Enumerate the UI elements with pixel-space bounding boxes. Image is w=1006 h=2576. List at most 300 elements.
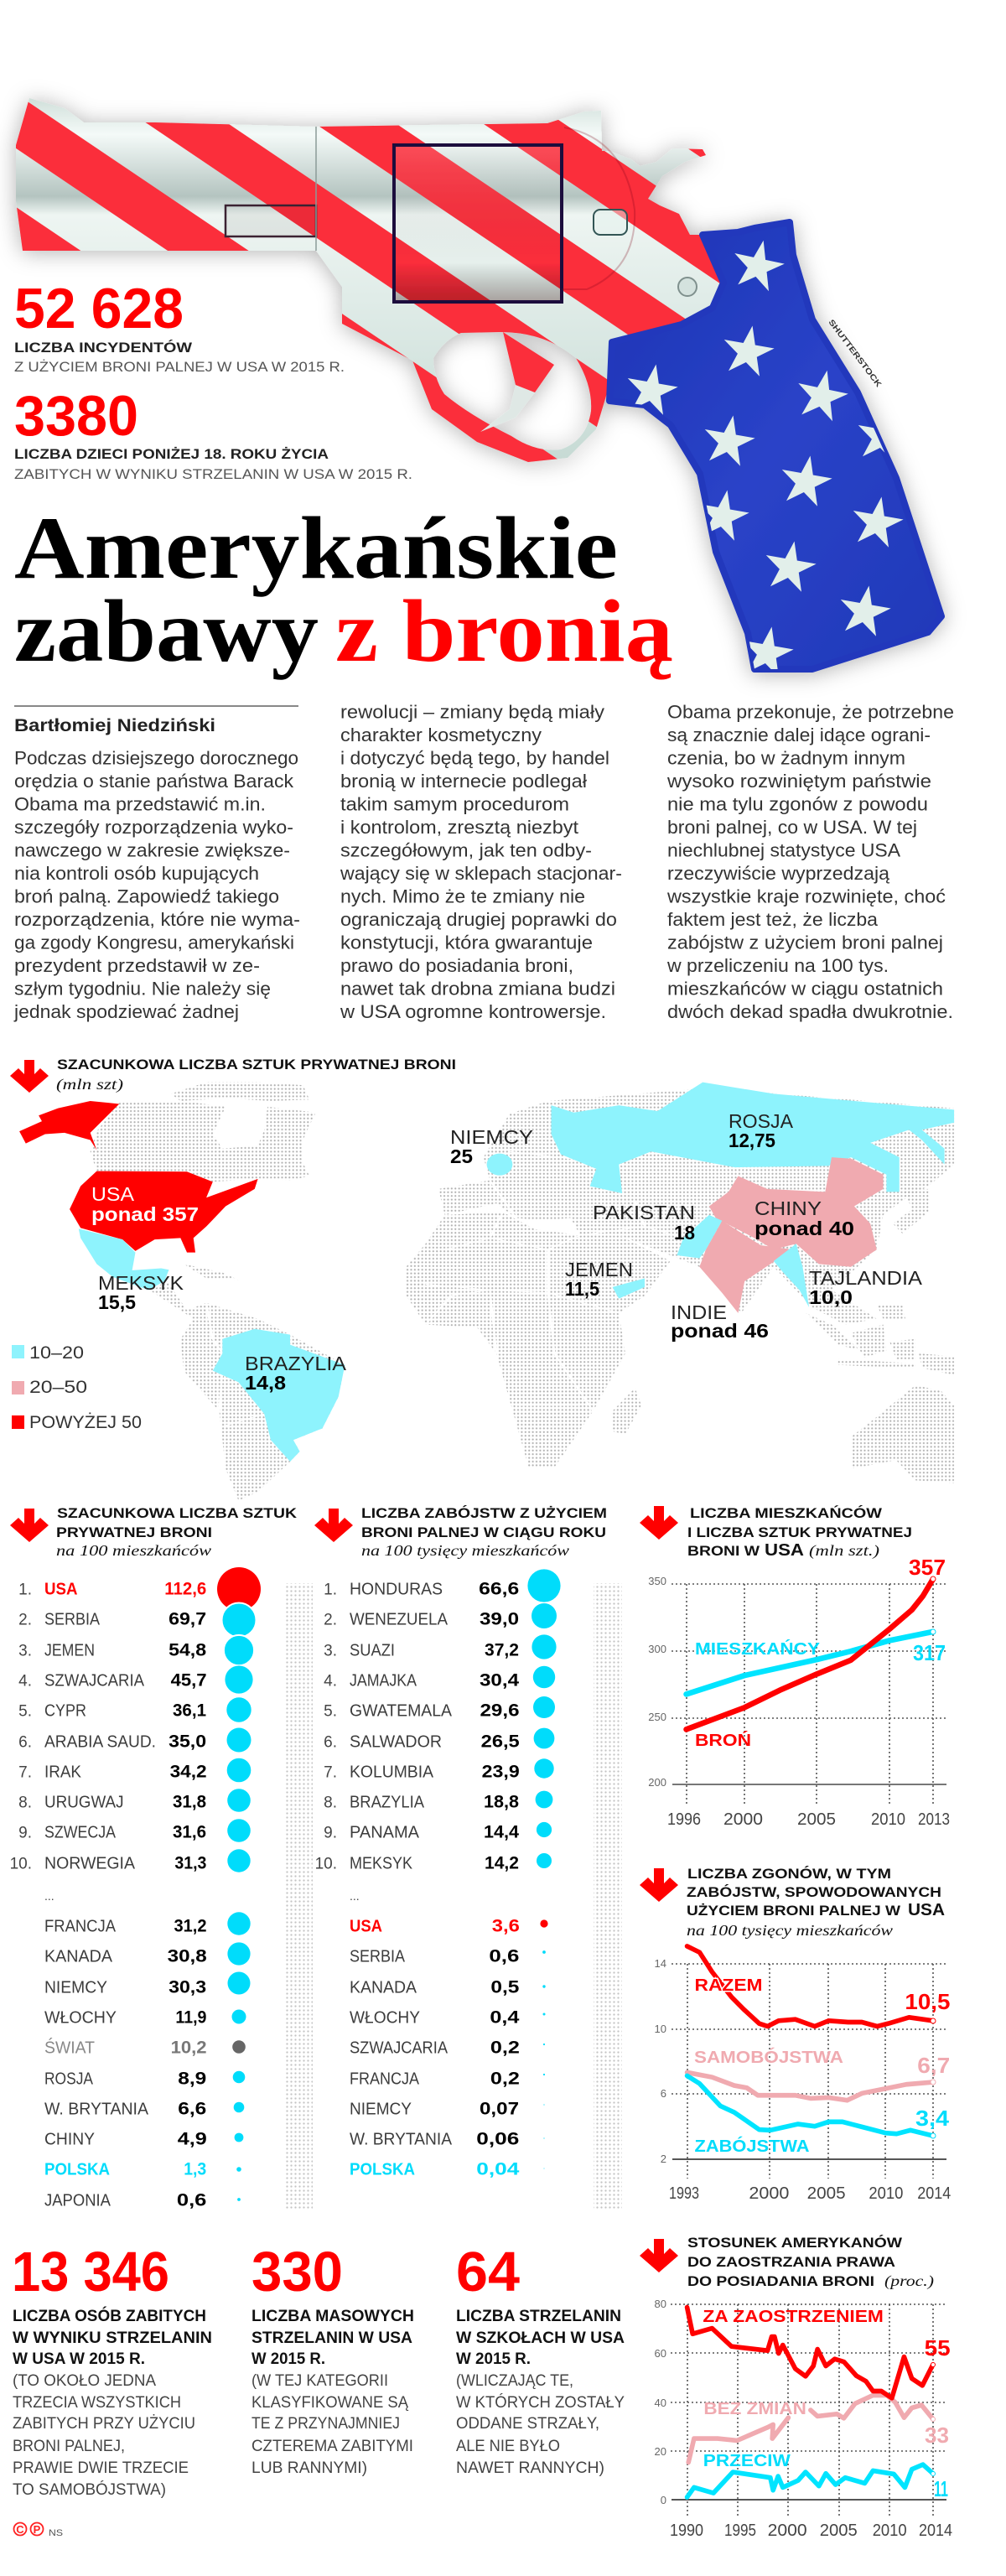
row 4 Jamajka: 4. xyxy=(324,1672,337,1690)
value: 10,5: 10,5 xyxy=(905,1989,950,2014)
frame seam xyxy=(315,127,317,251)
row 8 Urugwaj: 31,8 xyxy=(173,1793,206,1811)
map label: Chiny: CHINY xyxy=(754,1197,822,1219)
row 3 Jemen: 3. xyxy=(18,1642,32,1660)
article column 3: niechlubnej statystyce USA xyxy=(667,840,900,860)
row W. Brytania: W. BRYTANIA xyxy=(350,2130,453,2148)
illustration: revolver in American flag colours xyxy=(16,98,941,679)
row Świat: ŚWIAT xyxy=(44,2038,95,2058)
stat: 52 628 incidents: 52 628 xyxy=(14,277,184,340)
row 6 Salwador xyxy=(324,1728,554,1751)
end markers xyxy=(931,1576,936,1634)
stat: 64 school shootings xyxy=(456,2241,625,2477)
grip: blue with white stars xyxy=(609,222,941,679)
map label: Meksyk: MEKSYK xyxy=(98,1272,184,1294)
article column 1: ga zgody Kongresu, amerykański xyxy=(14,932,294,953)
article column 2: szczegółowym, jak ten odby- xyxy=(340,840,592,860)
row Polska: 0,04 xyxy=(476,2160,520,2179)
row 4 Szwajcaria: 45,7 xyxy=(171,1670,207,1690)
map label: Niemcy: NIEMCY xyxy=(450,1126,533,1148)
stat note: (TO OKOŁO JEDNA xyxy=(13,2372,156,2390)
row 2 Wenezuela: 39,0 xyxy=(480,1610,519,1628)
article column 2: konstytucji, która gwarantuje xyxy=(340,932,593,953)
row Włochy: 0,4 xyxy=(490,2007,520,2028)
stat note xyxy=(252,2372,413,2477)
article column 1: Obama ma przedstawić m.in. xyxy=(14,793,266,815)
heading: population and guns in USA: BRONI W xyxy=(687,1543,760,1559)
row 2 Wenezuela: 2. xyxy=(324,1612,337,1628)
stat note xyxy=(13,2372,195,2499)
row Francja xyxy=(350,2070,545,2088)
article column 1: nawczego w zakresie zwiększe- xyxy=(14,840,290,860)
map label: Rosja: ROSJA xyxy=(729,1110,794,1132)
row 7 Kolumbia xyxy=(324,1758,554,1781)
article column 3: w przeliczeniu na 100 tys. xyxy=(666,955,889,976)
row Włochy: WŁOCHY xyxy=(350,2009,420,2028)
map label: Brazylia: BRAZYLIA xyxy=(245,1353,347,1374)
stat description: W USA W 2015 R. xyxy=(13,2350,145,2368)
line: for tightening xyxy=(687,2308,933,2398)
stat note: KLASYFIKOWANE SĄ xyxy=(252,2394,408,2412)
map label: Indie xyxy=(671,1301,769,1342)
article column 3: zabójstw z użyciem broni palnej xyxy=(667,932,943,953)
article column 3: czenia, bo w żadnym innym xyxy=(667,748,905,768)
heading: guns per 100 residents: na 100 mieszkańców xyxy=(56,1542,211,1559)
stat note: TO SAMOBÓJSTWA) xyxy=(13,2480,166,2499)
chart 1 y axis: 300 xyxy=(648,1643,666,1655)
line: against xyxy=(687,2464,933,2497)
stat note: LUB RANNYMI) xyxy=(252,2459,367,2477)
row Francja: 0,2 xyxy=(490,2070,520,2088)
row 1 Honduras: 1. xyxy=(324,1581,337,1598)
map label: Tajlandia: 10,0 xyxy=(809,1286,853,1308)
stat note: NAWET RANNYCH) xyxy=(456,2459,604,2477)
map label: Jemen: 11,5 xyxy=(565,1278,599,1300)
stat description xyxy=(252,2308,414,2368)
row 1 USA xyxy=(18,1567,261,1611)
article column 2: i dotyczyć będą tego, by handel xyxy=(340,748,609,768)
row Kanada: 30,8 xyxy=(168,1947,207,1966)
row USA xyxy=(350,1917,548,1935)
legend: POWYŻEJ 50 xyxy=(29,1413,142,1432)
row W. Brytania xyxy=(350,2130,545,2148)
chart 2 x axis: 2014 xyxy=(917,2184,951,2203)
chart 1 x axis: 1996 xyxy=(667,1810,701,1829)
row 4 Szwajcaria: 4. xyxy=(18,1672,32,1690)
chart 2 x axis xyxy=(669,2184,951,2203)
row 4 Jamajka xyxy=(324,1666,555,1690)
row 5 Cypr: 36,1 xyxy=(173,1701,206,1721)
country: Russia xyxy=(551,1083,954,1193)
chart 2 grid xyxy=(672,1964,946,2179)
label: Broń: BROŃ xyxy=(695,1731,751,1750)
land: dotted continents xyxy=(91,1083,954,1500)
stat description: W 2015 R. xyxy=(456,2350,531,2368)
row 1 Honduras: HONDURAS xyxy=(350,1580,443,1598)
row 9 Szwecja: SZWECJA xyxy=(44,1823,117,1841)
map label: USA xyxy=(91,1183,199,1225)
heading: deaths from firearms in USA xyxy=(687,1866,945,1939)
row 3 Suazi: 3. xyxy=(324,1642,337,1660)
row 10 Meksyk: 14,2 xyxy=(485,1853,519,1873)
map label: Chiny xyxy=(754,1197,854,1239)
chart 2 x axis: 2010 xyxy=(869,2184,903,2203)
row 8 Urugwaj: 8. xyxy=(18,1794,32,1811)
row 10 Norwegia: 31,3 xyxy=(174,1853,206,1873)
chart 1 x axis: 2013 xyxy=(918,1810,950,1829)
row Włochy: 11,9 xyxy=(175,2007,206,2028)
row 1 USA: 1. xyxy=(18,1581,32,1598)
map label: Brazylia xyxy=(245,1353,347,1394)
row Serbia xyxy=(350,1947,546,1966)
row Kanada xyxy=(44,1942,251,1966)
title: Amerykańskie xyxy=(14,499,618,597)
line chart: population and guns in USA xyxy=(648,1555,950,1829)
chart 3 y axis xyxy=(655,2298,666,2506)
chart 1 x axis xyxy=(667,1810,950,1829)
stat: 52 628 incidents: LICZBA INCYDENTÓW xyxy=(14,340,193,356)
heading: gun homicides per 100k: BRONI PALNEJ W CIĄGU ROKU xyxy=(361,1524,606,1540)
chart 1 x axis: 2000 xyxy=(723,1810,763,1829)
barrel lower slot xyxy=(226,205,316,236)
title xyxy=(14,499,673,680)
row Polska: POLSKA xyxy=(350,2160,415,2179)
chart 3 x axis xyxy=(670,2521,952,2540)
row 3 Suazi xyxy=(324,1634,557,1660)
icon: table 2 arrow xyxy=(314,1509,353,1542)
stat note: W KTÓRYCH ZOSTAŁY xyxy=(456,2393,625,2412)
row Francja: 31,2 xyxy=(174,1917,206,1935)
article column 3: nie ma tylu zgonów z powodu xyxy=(667,793,928,815)
map label: Niemcy xyxy=(450,1126,533,1167)
map label: Jemen: JEMEN xyxy=(565,1259,633,1280)
article column 2: rewolucji – zmiany będą miały xyxy=(340,701,604,723)
trigger xyxy=(480,332,554,432)
row 6 Salwador: 26,5 xyxy=(481,1732,520,1751)
stat description: STRZELANIN W USA xyxy=(252,2329,412,2347)
row 7 Kolumbia: KOLUMBIA xyxy=(350,1763,434,1781)
article column 2: wający się w sklepach stacjonar- xyxy=(340,863,622,884)
chart 3 y axis: 80 xyxy=(655,2298,666,2310)
stat: 3380 children xyxy=(14,384,412,482)
value: 55: 55 xyxy=(925,2335,951,2360)
row 8 Brazylia xyxy=(324,1791,552,1811)
article column 2: nych. Mimo że te zmiany nie xyxy=(340,886,585,907)
heading: deaths from firearms in USA: LICZBA ZGONÓW, W TYM xyxy=(687,1866,891,1882)
chart 3 y axis: 0 xyxy=(661,2494,666,2506)
row Rosja: ROSJA xyxy=(44,2070,94,2088)
map label: Brazylia: 14,8 xyxy=(245,1372,286,1394)
chart 1 x axis: 2010 xyxy=(871,1810,905,1829)
legend: 10–20 xyxy=(29,1343,84,1363)
label: Zabójstwa: ZABÓJSTWA xyxy=(694,2136,810,2156)
row 2 Wenezuela: WENEZUELA xyxy=(350,1610,449,1628)
end markers xyxy=(931,2018,936,2138)
chart 3 x axis: 2000 xyxy=(768,2521,807,2540)
value: 3,4: 3,4 xyxy=(915,2106,950,2131)
copyright marks: NS xyxy=(49,2528,63,2538)
stat description: W SZKOŁACH W USA xyxy=(456,2329,625,2347)
row Serbia: SERBIA xyxy=(350,1947,406,1966)
row 1 Honduras xyxy=(324,1569,561,1602)
stat description: W 2015 R. xyxy=(252,2350,325,2368)
heading: private guns map: (mln szt) xyxy=(56,1076,123,1093)
row W. Brytania: W. BRYTANIA xyxy=(44,2100,149,2118)
stat: 330 mass shootings xyxy=(252,2241,414,2477)
title: z bronią xyxy=(335,582,673,680)
row Francja: FRANCJA xyxy=(350,2070,420,2088)
row 6 Arabia Saud.: ARABIA SAUD. xyxy=(44,1732,156,1751)
chart 1 grid xyxy=(672,1584,946,1804)
row Niemcy: 30,3 xyxy=(169,1977,206,1997)
stat note: PRAWIE DWIE TRZECIE xyxy=(13,2459,189,2477)
chart 3 x axis: 2005 xyxy=(820,2521,858,2540)
row 2 Serbia: 2. xyxy=(18,1612,32,1628)
icon: chart 1 arrow xyxy=(640,1506,678,1540)
country: USA xyxy=(70,1171,258,1253)
heading: attitudes to gun law: STOSUNEK AMERYKANÓW xyxy=(687,2235,903,2251)
map label: Meksyk xyxy=(98,1272,184,1313)
chart 3 y axis: 20 xyxy=(655,2445,666,2458)
stat: 13 346 killed xyxy=(12,2241,212,2499)
row 9 Panama: 14,4 xyxy=(484,1823,519,1841)
article column 2: i kontrolom, zresztą niezbyt xyxy=(340,817,578,838)
row W. Brytania xyxy=(44,2100,244,2118)
map label: Indie: ponad 46 xyxy=(671,1320,769,1342)
row 5 Cypr: CYPR xyxy=(44,1702,86,1721)
row 8 Urugwaj xyxy=(18,1789,251,1812)
value: 357: 357 xyxy=(909,1555,946,1580)
gun body: silver metal xyxy=(16,98,723,462)
row 10 Meksyk xyxy=(315,1853,552,1873)
heading: attitudes to gun law: DO POSIADANIA BRONI xyxy=(687,2273,874,2289)
row 10 Norwegia: NORWEGIA xyxy=(44,1855,136,1873)
row 3 Jemen: 54,8 xyxy=(169,1640,206,1660)
copyright marks: P xyxy=(34,2523,41,2536)
legend: 20–50 xyxy=(29,1378,87,1397)
article column 2: nawet tak drobna zmiana budzi xyxy=(340,978,615,1000)
map label: Pakistan: PAKISTAN xyxy=(593,1202,695,1223)
stat note: CZTEREMA ZABITYMI xyxy=(252,2438,413,2455)
heading: deaths from firearms in USA: na 100 tysięcy mieszkańców xyxy=(687,1922,893,1939)
icon: map section arrow xyxy=(10,1060,49,1093)
stat note: TE Z PRZYNAJMNIEJ xyxy=(252,2415,400,2433)
map label: Rosja xyxy=(729,1110,794,1151)
article column 3 xyxy=(666,701,954,1022)
heading: guns per 100 residents: SZACUNKOWA LICZBA SZTUK xyxy=(57,1505,298,1521)
row 2 Serbia: 69,7 xyxy=(169,1610,206,1628)
row 6 Arabia Saud.: 35,0 xyxy=(169,1732,206,1751)
heading: population and guns in USA: LICZBA MIESZKAŃCÓW xyxy=(690,1505,883,1521)
row Szwajcaria xyxy=(350,2038,545,2058)
heading: private guns map xyxy=(56,1057,456,1093)
country: Thailand and Myanmar xyxy=(774,1244,809,1307)
article column 2: takim samym procedurom xyxy=(340,793,569,815)
article column 2: charakter kosmetyczny xyxy=(340,724,542,745)
map label: Tajlandia xyxy=(809,1267,923,1308)
chart 2 x axis: 2005 xyxy=(807,2184,846,2203)
article column 2: w USA ogromne kontrowersje. xyxy=(340,1001,606,1022)
row 4 Szwajcaria: SZWAJCARIA xyxy=(44,1672,145,1690)
row 1 Honduras: 66,6 xyxy=(479,1580,519,1598)
row USA: USA xyxy=(350,1917,382,1935)
article column 1: szczegóły rozporządzenia wyko- xyxy=(14,817,293,838)
label: Bez zmian: BEZ ZMIAN xyxy=(703,2400,806,2418)
crane shading xyxy=(562,127,635,289)
article column 2: ograniczają drugiej poprawki do xyxy=(340,909,617,930)
row 1 USA: USA xyxy=(44,1580,77,1598)
stat: 3380 children: LICZBA DZIECI PONIŻEJ 18. ROKU ŻYCIA xyxy=(14,446,329,462)
row Włochy xyxy=(44,2007,246,2028)
country: Alaska xyxy=(19,1101,119,1150)
row Niemcy: NIEMCY xyxy=(350,2100,412,2118)
row Polska xyxy=(44,2160,241,2179)
stat description: LICZBA MASOWYCH xyxy=(252,2308,414,2325)
chart 2 y axis xyxy=(655,1957,666,2165)
chart 1 y axis: 200 xyxy=(648,1776,666,1789)
row Świat xyxy=(44,2038,246,2058)
value: 11: 11 xyxy=(934,2476,948,2501)
row Szwajcaria: SZWAJCARIA xyxy=(350,2039,449,2058)
article column 1: jednak spodziewać żadnej xyxy=(13,1001,239,1022)
map label: Tajlandia: TAJLANDIA xyxy=(809,1267,923,1289)
chart 2 y axis: 10 xyxy=(655,2023,666,2035)
row Kanada: 0,5 xyxy=(490,1977,520,1997)
cylinder xyxy=(394,145,562,302)
row 9 Szwecja: 31,6 xyxy=(173,1823,206,1841)
cylinder latch xyxy=(594,210,627,235)
row 5 Cypr xyxy=(18,1697,252,1722)
row 3 Jemen xyxy=(18,1635,254,1665)
heading: population and guns in USA xyxy=(687,1505,912,1560)
map label: Meksyk: 15,5 xyxy=(98,1291,136,1313)
stat note: ZABITYCH PRZY UŻYCIU xyxy=(13,2415,195,2433)
row 6 Salwador: SALWADOR xyxy=(350,1732,442,1751)
row 9 Szwecja: 9. xyxy=(18,1825,32,1841)
chart 3 y axis: 40 xyxy=(655,2397,666,2409)
stat note: BRONI PALNEJ, xyxy=(13,2438,125,2455)
row 8 Brazylia: BRAZYLIA xyxy=(350,1793,425,1811)
heading: private guns map: SZACUNKOWA LICZBA SZTUK PRYWATNEJ BRONI xyxy=(57,1057,456,1072)
row 9 Szwecja xyxy=(18,1819,251,1842)
map label: Niemcy: 25 xyxy=(450,1145,473,1167)
title: zabawy xyxy=(14,582,319,680)
chart 1 x axis: 2005 xyxy=(797,1810,836,1829)
value: 33: 33 xyxy=(925,2423,949,2448)
heading: attitudes to gun law xyxy=(687,2235,934,2290)
copyright marks: C xyxy=(16,2523,24,2536)
map label: Pakistan: 18 xyxy=(674,1222,695,1244)
article column 1: nia kontroli osób kupujących xyxy=(14,863,259,884)
stat description: LICZBA OSÓB ZABITYCH xyxy=(13,2307,206,2325)
table: guns per 100 residents xyxy=(10,1567,261,2210)
article column 1: broń palną. Zapowiedź takiego xyxy=(14,886,279,907)
heading: gun homicides per 100k xyxy=(361,1505,607,1559)
chart 1 y axis: 350 xyxy=(648,1575,666,1587)
row 6 Salwador: 6. xyxy=(324,1734,337,1751)
chart 2 y axis: 14 xyxy=(655,1957,666,1970)
row Niemcy: 0,07 xyxy=(480,2100,519,2118)
article column 1 xyxy=(13,748,300,1022)
row Francja: FRANCJA xyxy=(44,1917,117,1935)
row 9 Panama: PANAMA xyxy=(350,1823,420,1841)
label: Samobójstwa: SAMOBÓJSTWA xyxy=(694,2047,843,2067)
stat note xyxy=(456,2372,625,2477)
line chart: deaths from firearms xyxy=(655,1946,951,2203)
country: Pakistan xyxy=(677,1215,722,1258)
row 8 Urugwaj: URUGWAJ xyxy=(44,1793,124,1811)
row 7 Irak xyxy=(18,1758,251,1782)
stat: 3380 children: 3380 xyxy=(14,384,138,448)
heading: population and guns in USA: I LICZBA SZTUK PRYWATNEJ xyxy=(687,1524,912,1540)
row Chiny: 4,9 xyxy=(178,2130,207,2148)
stat note: ODDANE STRZAŁY, xyxy=(456,2415,599,2433)
country: Brazil xyxy=(213,1329,345,1462)
row 6 Arabia Saud. xyxy=(18,1727,252,1753)
label: Przeciw: PRZECIW xyxy=(703,2452,791,2470)
row 1 USA: 112,6 xyxy=(164,1580,206,1598)
stat description: LICZBA STRZELANIN xyxy=(456,2308,621,2325)
article column 3: wysoko rozwiniętym państwie xyxy=(666,771,931,792)
row 10 Meksyk: 10. xyxy=(315,1855,337,1873)
row Serbia: 0,6 xyxy=(489,1947,519,1966)
row Kanada: KANADA xyxy=(350,1979,417,1997)
article column 3: Obama przekonuje, że potrzebne xyxy=(667,701,954,723)
table: gun homicides per 100k xyxy=(315,1569,561,2179)
row Włochy xyxy=(350,2007,545,2028)
row Japonia: JAPONIA xyxy=(44,2192,111,2210)
row 10 Norwegia: 10. xyxy=(10,1855,32,1873)
row Włochy: WŁOCHY xyxy=(44,2009,117,2028)
row USA: 3,6 xyxy=(492,1917,520,1935)
photo credit: SHUTTERSTOCK xyxy=(827,318,883,389)
row 2 Serbia: SERBIA xyxy=(44,1610,101,1628)
row 8 Brazylia: 8. xyxy=(324,1794,337,1811)
article column 1: Podczas dzisiejszego dorocznego xyxy=(14,748,298,768)
row W. Brytania: 0,06 xyxy=(476,2130,519,2148)
stat: 52 628 incidents: Z UŻYCIEM BRONI PALNEJ W USA W 2015 R. xyxy=(14,359,345,375)
chart 2 y axis: 2 xyxy=(661,2153,666,2165)
ellipsis: ... xyxy=(44,1889,54,1903)
row 9 Panama xyxy=(324,1822,552,1841)
chart 3 x axis: 2014 xyxy=(919,2521,952,2540)
row 3 Jemen: JEMEN xyxy=(44,1642,95,1660)
row Szwajcaria: 0,2 xyxy=(490,2038,520,2058)
country: India xyxy=(699,1221,793,1313)
row 6 Arabia Saud.: 6. xyxy=(18,1734,32,1751)
icon: chart 3 arrow xyxy=(640,2239,678,2272)
row Niemcy xyxy=(350,2100,545,2118)
stat: 13 346 killed: 13 346 xyxy=(12,2241,169,2303)
copyright marks xyxy=(13,2522,63,2538)
icon: table 1 arrow xyxy=(10,1509,49,1542)
chart 3 grid xyxy=(671,2304,947,2516)
line: total xyxy=(687,1946,933,2026)
chart 3 y axis: 60 xyxy=(655,2347,666,2360)
gun body: red diagonal stripes xyxy=(16,98,723,462)
article column 3: broni palnej, co w USA. W tej xyxy=(667,817,917,838)
article column 1: orędzia o stanie państwa Barack xyxy=(14,771,294,792)
row Kanada: KANADA xyxy=(44,1947,113,1966)
stat description xyxy=(456,2308,625,2368)
country: Yemen xyxy=(613,1279,645,1299)
line: suicides xyxy=(687,2072,933,2101)
article column 3: są znacznie dalej idące ograni- xyxy=(667,724,931,745)
chart 1 y axis: 250 xyxy=(648,1711,666,1723)
world map xyxy=(19,1083,954,1500)
row 5 Gwatemala: 5. xyxy=(324,1702,337,1721)
article column 2: bronią w internecie podlegał xyxy=(340,771,587,792)
